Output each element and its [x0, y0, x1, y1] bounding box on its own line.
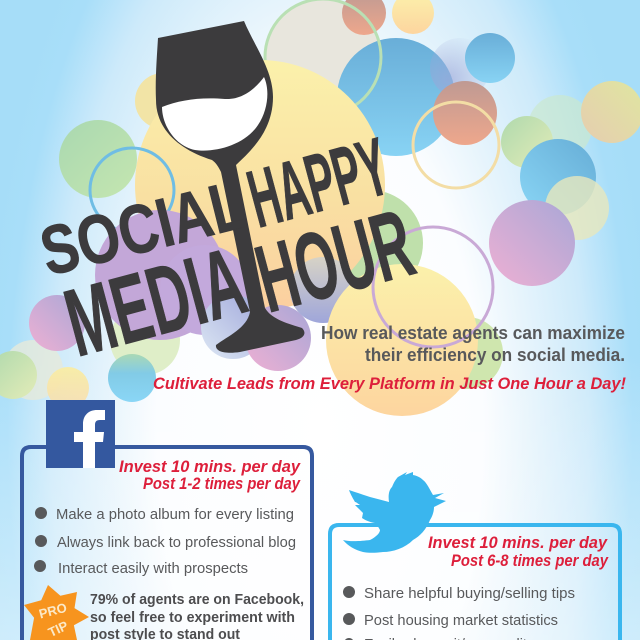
title: Social Media Happy Hour	[33, 121, 424, 377]
Twitter tips list	[343, 585, 575, 640]
subtitle	[321, 323, 625, 365]
Twitter tips list: Share helpful buying/selling tips	[364, 585, 575, 602]
Twitter schedule heading: Post 6-8 times per day	[451, 551, 609, 570]
Facebook schedule heading: Post 1-2 times per day	[143, 474, 301, 493]
Pro tip badge: PRO	[37, 600, 68, 622]
Facebook schedule heading: Invest 10 mins. per day	[119, 457, 301, 476]
title: Social Media Happy Hour: HOUR	[246, 190, 424, 333]
subtitle: How real estate agents can maximize	[321, 323, 625, 343]
title: Social Media Happy Hour: MEDIA	[55, 227, 256, 377]
panel: Twitter	[330, 472, 620, 640]
icon: wine glass	[156, 21, 304, 353]
subtitle: their efficiency on social media.	[365, 345, 625, 365]
Facebook schedule heading	[119, 457, 301, 493]
Facebook pro tip text	[90, 591, 304, 640]
panel: Facebook	[22, 400, 312, 640]
Pro tip badge: TIP	[46, 618, 71, 640]
Pro tip badge	[24, 585, 89, 640]
Facebook pro tip text: 79% of agents are on Facebook,	[90, 591, 304, 608]
Facebook pro tip text: so feel free to experiment with	[90, 609, 295, 626]
Facebook tips list: Make a photo album for every listing	[56, 506, 294, 523]
tagline: Cultivate Leads from Every Platform in Just One Hour a Day!	[153, 374, 626, 393]
Twitter tips list: Post housing market statistics	[364, 612, 558, 629]
title: Social Media Happy Hour: HAPPY	[239, 121, 398, 245]
Facebook tips list: Always link back to professional blog	[57, 534, 296, 551]
Twitter schedule heading: Invest 10 mins. per day	[428, 533, 608, 552]
icon: Twitter bird	[343, 472, 446, 553]
decorative bubbles	[0, 0, 640, 416]
Twitter schedule heading	[428, 533, 609, 570]
icon: Facebook logo	[46, 400, 115, 468]
title: Social Media Happy Hour: SOCIAL	[33, 166, 252, 291]
Facebook tips list: Interact easily with prospects	[58, 560, 248, 577]
Facebook tips list	[34, 506, 296, 577]
